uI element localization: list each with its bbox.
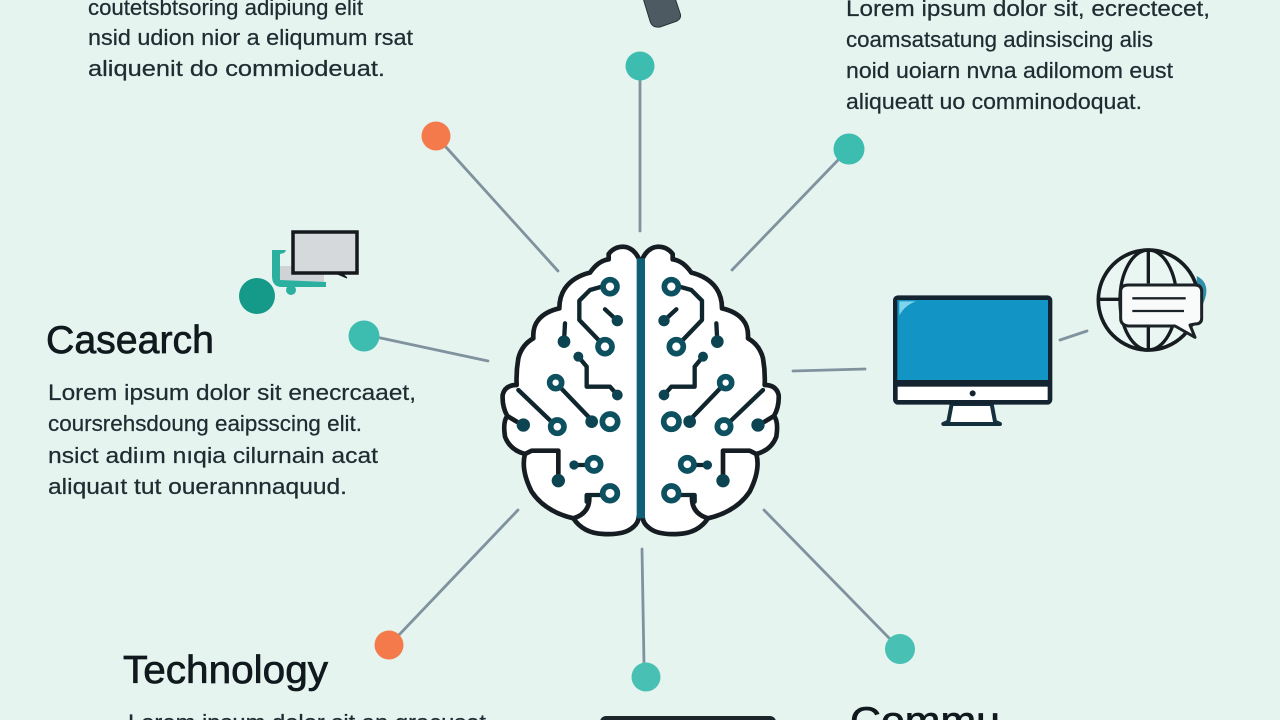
text block: left: nsict adiım nıqia cilurnain acat [48, 443, 378, 468]
text block: top right: noid uoiarn nvna adilomom eust [846, 58, 1173, 83]
connector: bottom [632, 549, 660, 692]
text block: top right: coamsatsatung adinsiscing alis [846, 27, 1153, 52]
text block: top left [88, 0, 413, 81]
left hemisphere [503, 247, 639, 534]
connector: lower left [374, 510, 518, 660]
connector: lower right [764, 510, 915, 664]
text block: top right: aliqueatt uo comminodoquat. [846, 89, 1142, 114]
icon: globe with speech bubble [1098, 250, 1206, 350]
icon: bottom device, cropped [600, 716, 776, 720]
text block: top left: nsid udion nior a eliqumum rsat [88, 25, 413, 50]
connector: brain to monitor [793, 369, 865, 371]
connector: monitor to globe [1060, 331, 1087, 340]
icon: desktop monitor [895, 298, 1050, 424]
connector: upper right [732, 134, 864, 270]
heading: Technology: Technology [123, 649, 329, 692]
icon: small screen with teal bracket [239, 232, 357, 314]
icon: top device, cropped [643, 0, 681, 27]
connector: upper left [422, 122, 558, 271]
text block: left: coursrehsdoung eaipsscing elit. [48, 411, 362, 436]
icon: brain with circuits [503, 247, 779, 534]
text block: top left: aliquenit do commiodeuat. [88, 56, 385, 81]
heading: Casearch: Casearch [46, 319, 214, 362]
connector: top [626, 52, 654, 231]
text block: left: Lorem ipsum dolor sit enecrcaaet, [48, 380, 416, 405]
connector: left [348, 320, 488, 361]
right hemisphere [643, 247, 779, 534]
text block: top right [846, 0, 1210, 114]
text block: left: aliquaıt tut ouerannnaquud. [48, 474, 347, 499]
central divider [637, 258, 645, 518]
text block: left [48, 380, 416, 499]
